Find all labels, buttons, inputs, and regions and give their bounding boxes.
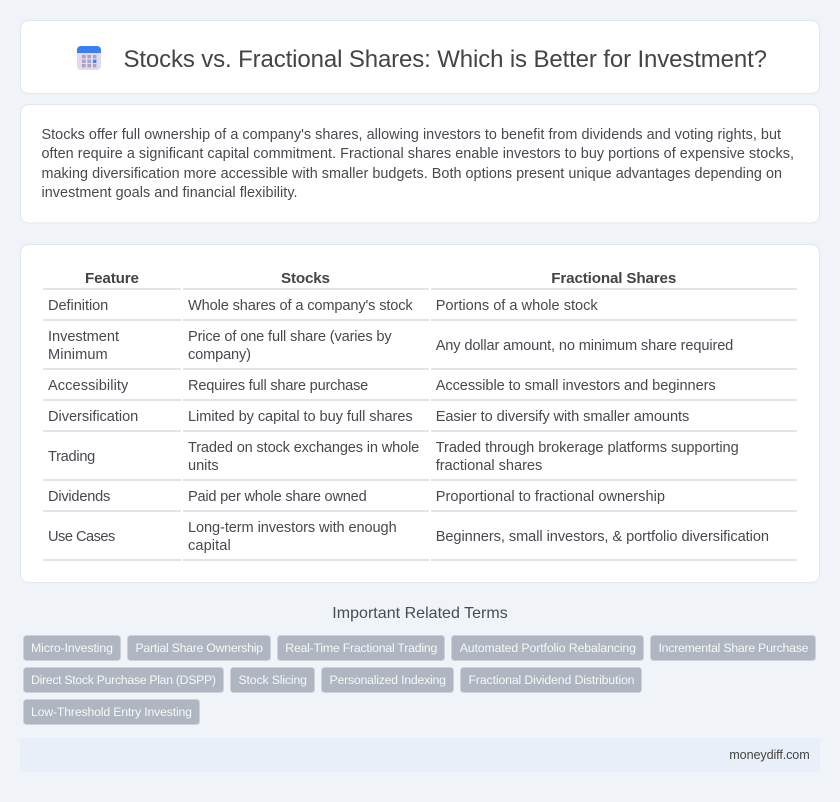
heading: important related terms: Important Related Terms <box>332 605 508 622</box>
row: dividends <box>48 489 665 505</box>
row: dividends: Paid per whole share owned <box>188 489 367 505</box>
tag: partial share ownership <box>128 636 270 660</box>
row: diversification: Easier to diversify with smaller amounts <box>436 409 689 425</box>
panel: comparison table <box>20 244 820 582</box>
table header row: Feature <box>85 270 139 287</box>
text block: intro: often require a significant capital commitment. Fractional shares enable investors to buy portions of expensive stocks, <box>42 146 794 162</box>
table header row: Fractional Shares <box>551 270 676 287</box>
row: diversification: Diversification <box>48 409 138 425</box>
tag: personalized indexing: Personalized Indexing <box>330 673 446 687</box>
table header row: Stocks <box>281 270 330 287</box>
row: accessibility: Accessibility <box>48 378 129 394</box>
row: investment minimum: Price of one full share (varies by <box>188 329 392 345</box>
row: definition: Whole shares of a company's stock <box>188 298 413 314</box>
row: diversification <box>48 409 689 425</box>
row: investment minimum: Investment <box>48 329 119 345</box>
tag: automated portfolio rebalancing <box>452 636 644 660</box>
row: trading: Trading <box>48 449 95 465</box>
row: use cases: Beginners, small investors, & portfolio diversification <box>436 529 769 545</box>
tag: incremental share purchase <box>650 636 816 660</box>
text block: intro: making diversification more accessible with smaller budgets. Both options present unique advantages depending on <box>42 166 782 182</box>
tag: real-time fractional trading: Real-Time Fractional Trading <box>285 641 437 655</box>
tag: fractional dividend distribution: Fractional Dividend Distribution <box>468 673 635 687</box>
row: dividends: Proportional to fractional ownership <box>436 489 665 505</box>
row: definition: Portions of a whole stock <box>436 298 598 314</box>
row: definition <box>48 298 598 314</box>
text block: intro: investment goals and financial flexibility. <box>42 185 298 201</box>
tag list <box>24 636 816 724</box>
tag: direct stock purchase plan: Direct Stock Purchase Plan (DSPP) <box>31 673 216 687</box>
tag: automated portfolio rebalancing: Automated Portfolio Rebalancing <box>460 641 636 655</box>
row: investment minimum: Any dollar amount, no minimum share required <box>436 338 733 354</box>
panel: title header <box>20 20 820 94</box>
row: diversification: Limited by capital to buy full shares <box>188 409 413 425</box>
row: use cases: capital <box>188 538 231 554</box>
row: use cases: Long-term investors with enough <box>188 520 397 536</box>
row: use cases: Use Cases <box>48 529 115 545</box>
tag: real-time fractional trading <box>278 636 444 660</box>
tag: stock slicing: Stock Slicing <box>238 673 307 687</box>
text block: intro: Stocks offer full ownership of a company's shares, allowing investors to benefit from dividends and voting rights, but <box>42 127 781 143</box>
row: use cases <box>48 520 769 554</box>
footer source text: moneydiff.com <box>729 748 810 762</box>
row: trading <box>48 440 739 474</box>
row: dividends: Dividends <box>48 489 110 505</box>
row: trading: Traded through brokerage platforms supporting <box>436 440 739 456</box>
tag: stock slicing <box>230 668 314 692</box>
panel: intro paragraph <box>20 104 820 223</box>
row: trading: fractional shares <box>436 458 542 474</box>
tag: low-threshold entry investing: Low-Threshold Entry Investing <box>31 705 192 719</box>
text block: intro <box>42 127 794 201</box>
tag: partial share ownership: Partial Share Ownership <box>136 641 263 655</box>
row: trading: units <box>188 458 219 474</box>
tag: fractional dividend distribution <box>460 668 642 692</box>
row: definition: Definition <box>48 298 108 314</box>
row: trading: Traded on stock exchanges in whole <box>188 440 419 456</box>
row: accessibility: Requires full share purchase <box>188 378 368 394</box>
tag: micro-investing <box>24 636 120 660</box>
row: accessibility <box>48 378 716 394</box>
tag: personalized indexing <box>322 668 454 692</box>
tag: incremental share purchase: Incremental Share Purchase <box>658 641 809 655</box>
icon: calendar <box>77 46 101 70</box>
row: investment minimum: Minimum <box>48 347 108 363</box>
row: accessibility: Accessible to small investors and beginners <box>436 378 716 394</box>
tag: micro-investing: Micro-Investing <box>31 641 113 655</box>
footer <box>20 738 820 772</box>
title: Stocks vs. Fractional Shares: Which is Better for Investment? <box>124 46 767 73</box>
table header row <box>85 270 676 287</box>
tag: direct stock purchase plan <box>24 668 224 692</box>
row: investment minimum: company) <box>188 347 251 363</box>
row: investment minimum <box>48 329 733 363</box>
tag: low-threshold entry investing <box>24 700 200 724</box>
